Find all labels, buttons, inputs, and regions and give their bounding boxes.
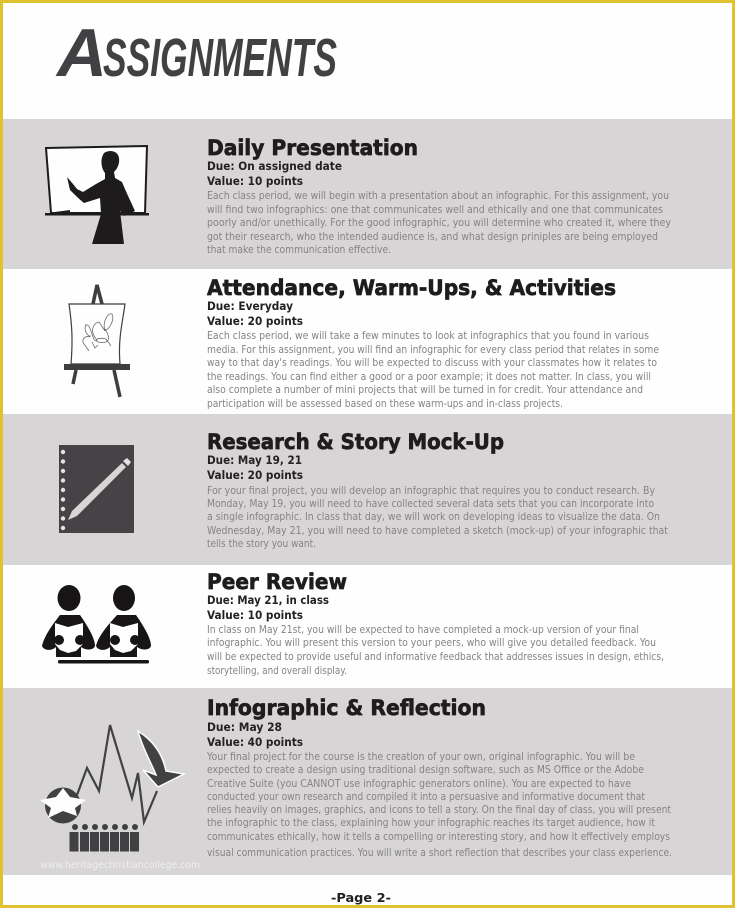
description: [206, 751, 672, 859]
description: storytelling, and overall display.: [207, 665, 347, 677]
description: poorly and/or unethically. For the good infographic, you will determine who created it, where they: [207, 217, 671, 229]
description: Creative Suite (you CANNOT use infographic generators online). You are expected to have: [207, 778, 631, 790]
description: Each class period, we will take a few minutes to look at infographics that you found in various: [207, 330, 649, 342]
due date: Due: Everyday: [207, 299, 293, 313]
description: Wednesday, May 21, you will need to have completed a sketch (mock-up) of your infographic that: [207, 525, 668, 537]
due date: Due: May 19, 21: [207, 453, 302, 467]
description: that make the communication effective.: [207, 244, 391, 256]
watermark: www.heritagechristiancollege.com: [40, 860, 200, 871]
value: Value: 40 points: [207, 735, 303, 749]
description: will find two infographics: one that communicates well and ethically and one that communicates: [207, 204, 663, 216]
description: got their research, who the intended audience is, and what design prinipIes are being employed: [207, 231, 658, 243]
description: [207, 330, 659, 410]
description: way to that day's readings. You will be expected to discuss with your classmates how it relates to: [207, 357, 657, 369]
heading: Infographic & Reflection: [207, 696, 486, 720]
description: media. For this assignment, you will find an infographic for every class period that relates in some: [207, 344, 659, 356]
title: A: [55, 15, 107, 91]
description: the readings. You can find either a good or a poor example; it does not matter. In class, you will: [207, 371, 651, 383]
description: infographic. You will present this version to your peers, who will give you detailed feedback. You: [207, 637, 656, 649]
icon: chart with star, bird and people: [40, 725, 184, 852]
heading: Attendance, Warm-Ups, & Activities: [207, 276, 616, 300]
description: tells the story you want.: [207, 538, 316, 550]
due date: Due: On assigned date: [207, 159, 342, 173]
description: Monday, May 19, you will need to have collected several data sets that you can incorporate into: [207, 498, 654, 510]
description: visual communication practices. You will write a short reflection that describes your class experience.: [207, 847, 672, 859]
heading: Peer Review: [207, 570, 347, 594]
description: conducted your own research and compiled it into a persuasive and informative document that: [207, 791, 645, 803]
value: Value: 20 points: [207, 468, 303, 482]
icon: easel: [64, 285, 130, 397]
icon: teacher at whiteboard: [45, 146, 149, 244]
description: Your final project for the course is the creation of your own, original infographic. You will be: [206, 751, 635, 763]
due date: Due: May 21, in class: [207, 593, 329, 607]
panel: daily presentation: [3, 119, 732, 269]
description: [207, 190, 671, 256]
heading: Research & Story Mock-Up: [207, 430, 504, 454]
value: Value: 10 points: [207, 174, 303, 188]
heading: Daily Presentation: [207, 136, 418, 160]
description: expected to create a design using traditional design software, such as MS Office or the Adobe: [207, 764, 644, 776]
description: participation will be assessed based on these warm-ups and in-class projects.: [207, 398, 563, 410]
description: [207, 485, 668, 550]
description: also complete a number of mini projects that will be turned in for credit. Your attendance and: [207, 384, 643, 396]
description: In class on May 21st, you will be expected to have completed a mock-up version of your final: [207, 624, 639, 636]
title: [55, 15, 337, 91]
icon: notebook and pencil: [59, 445, 134, 533]
panel: research and story mock-up: [3, 414, 732, 565]
panel: infographic and reflection: [3, 688, 732, 875]
due date: Due: May 28: [207, 720, 282, 734]
value: Value: 10 points: [207, 608, 303, 622]
description: Each class period, we will begin with a presentation about an infographic. For this assignment, you: [207, 190, 669, 202]
description: relies heavily on images, graphics, and icons to tell a story. On the final day of class, you will present: [207, 804, 671, 816]
title: SSIGNMENTS: [103, 28, 337, 88]
description: [207, 624, 664, 677]
description: will be expected to provide useful and informative feedback that addresses issues in design, ethics,: [207, 651, 664, 663]
panel: attendance: [64, 276, 659, 410]
description: communicates ethically, how it tells a compelling or interesting story, and how it effectively employs: [207, 831, 670, 843]
value: Value: 20 points: [207, 314, 303, 328]
description: For your final project, you will develop an infographic that requires you to conduct research. By: [207, 485, 655, 497]
description: the infographic to the class, explaining how your infographic reaches its target audience, how it: [207, 817, 655, 829]
description: a single infographic. In class that day, we will work on developing ideas to visualize the data. On: [207, 511, 660, 523]
page number: -Page 2-: [331, 891, 391, 905]
icon: two readers: [42, 585, 151, 664]
panel: peer review: [42, 570, 664, 677]
